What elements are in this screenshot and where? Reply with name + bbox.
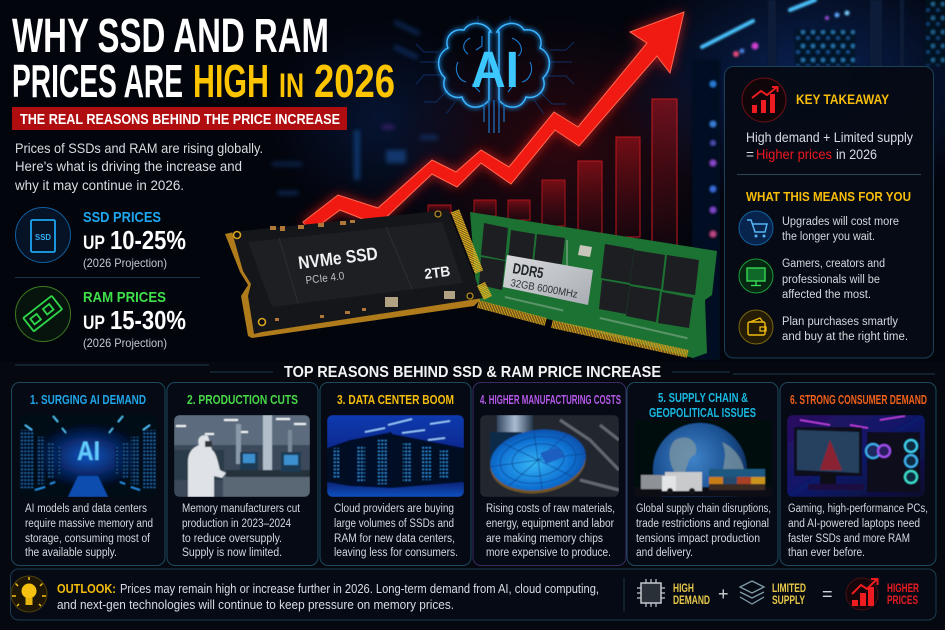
stat: RAM prices — [16, 286, 186, 350]
title — [12, 10, 395, 107]
description: and AI-powered laptops need — [788, 518, 920, 530]
intro text: Here's what is driving the increase and — [15, 158, 242, 174]
image: AI server corridor: AI — [77, 436, 100, 466]
equation: limited supply: SUPPLY — [772, 595, 805, 607]
outlook text: Prices may remain high or increase further in 2026. Long-term demand from AI, cloud computing, — [120, 581, 599, 596]
title: PRICES ARE — [12, 55, 183, 107]
panel: reason 4 higher manufacturing costs: 4. HIGHER MANUFACTURING COSTS — [480, 392, 621, 407]
panel: key takeaway: WHAT THIS MEANS FOR YOU — [746, 189, 911, 204]
equation: high demand: HIGH — [673, 583, 694, 595]
description: trade restrictions and regional — [636, 518, 769, 530]
item: gamers and creators affected: professionals will be — [782, 274, 880, 286]
stat: SSD prices: SSD PRICES — [83, 209, 161, 226]
stat: RAM prices: (2026 Projection) — [83, 336, 167, 350]
description: Rising costs of raw materials, — [486, 503, 615, 515]
icon: red rising chart — [742, 78, 786, 122]
item: upgrades cost more — [739, 211, 899, 245]
stat: SSD prices — [16, 208, 186, 270]
title: HIGH — [193, 55, 269, 107]
equation: higher prices: PRICES — [887, 595, 918, 607]
item: gamers and creators affected: Gamers, creators and — [782, 258, 885, 270]
description: production in 2023–2024 — [182, 518, 292, 530]
RAM memory chips — [479, 223, 699, 328]
description — [25, 503, 153, 559]
equation: limited supply: LIMITED — [772, 583, 806, 595]
equation: high demand — [637, 579, 710, 607]
SSD gold contacts — [455, 211, 479, 272]
panel: key takeaway: KEY TAKEAWAY — [796, 91, 890, 107]
SSD black label: PCIe 4.0 — [305, 270, 345, 287]
panel: reason 2 production cuts — [167, 382, 318, 566]
panel: reason 4 higher manufacturing costs — [473, 382, 626, 566]
stat: RAM prices: 15-30% — [110, 305, 186, 335]
panel: reason 3 data center boom — [320, 382, 471, 566]
panel: reason 5 supply chain and geopolitical issues: 5. SUPPLY CHAIN & — [658, 390, 748, 405]
stat: RAM prices: RAM PRICES — [83, 289, 166, 306]
panel: key takeaway — [724, 66, 934, 358]
item: plan purchases — [739, 310, 908, 344]
RAM silver label — [503, 255, 593, 305]
description: the available supply. — [25, 547, 117, 559]
item: gamers and creators affected: affected the most. — [782, 289, 871, 301]
stat: RAM prices: UP — [83, 313, 105, 334]
image: server racks — [327, 415, 464, 497]
description — [788, 503, 928, 559]
section heading: TOP REASONS BEHIND SSD & RAM PRICE INCREASE — [284, 364, 661, 381]
equation: high demand: DEMAND — [673, 595, 710, 607]
outlook text — [57, 581, 599, 612]
outlook text: OUTLOOK: — [57, 581, 116, 596]
stat: SSD prices: 10-25% — [110, 225, 186, 255]
description: Supply is now limited. — [182, 547, 282, 559]
icon: RAM stick — [16, 286, 70, 342]
SSD black label: 2TB — [424, 264, 451, 283]
panel: reason 2 production cuts: 2. PRODUCTION CUTS — [187, 392, 298, 407]
image: globe, trucks and containers — [640, 422, 766, 497]
takeaway text: = — [746, 147, 754, 162]
title: 2026 — [314, 55, 395, 107]
subtitle banner: THE REAL REASONS BEHIND THE PRICE INCREASE — [20, 112, 340, 128]
subtitle banner — [12, 107, 347, 130]
description: to reduce oversupply. — [182, 533, 282, 545]
panel: reason 5 supply chain and geopolitical issues: GEOPOLITICAL ISSUES — [649, 405, 756, 420]
icon: SSD drive: SSD — [35, 233, 51, 242]
section heading — [15, 364, 935, 381]
equation: higher prices: HIGHER — [887, 583, 919, 595]
description: energy, equipment and labor — [486, 518, 614, 530]
image: factory worker — [174, 415, 310, 497]
item: gamers and creators affected — [739, 258, 885, 301]
description — [182, 503, 301, 559]
item: plan purchases: Plan purchases smartly — [782, 316, 898, 328]
panel: reason 5 supply chain and geopolitical issues — [627, 382, 778, 566]
intro text: Prices of SSDs and RAM are rising globally. — [15, 140, 263, 156]
stat: SSD prices: (2026 Projection) — [83, 256, 167, 270]
item: upgrades cost more: the longer you wait. — [782, 231, 875, 243]
description: large volumes of SSDs and — [334, 518, 454, 530]
RAM gold contacts — [478, 304, 688, 354]
description: RAM for new data centers, — [334, 533, 455, 545]
panel: reason 1 surging AI demand — [12, 382, 165, 566]
description: Global supply chain disruptions, — [636, 503, 771, 515]
description: and delivery. — [636, 547, 693, 559]
description: leaving less for consumers. — [334, 547, 458, 559]
intro text: why it may continue in 2026. — [14, 177, 184, 193]
item: plan purchases: and buy at the right time. — [782, 331, 908, 343]
panel: reason 3 data center boom: 3. DATA CENTER BOOM — [337, 392, 454, 407]
description: storage, consuming most of — [25, 533, 151, 545]
takeaway text — [746, 130, 913, 162]
icon: light bulb — [11, 576, 47, 612]
item: upgrades cost more: Upgrades will cost more — [782, 216, 899, 228]
description: more expensive to produce. — [486, 547, 611, 559]
RAM silver label: 32GB 6000MHz — [509, 277, 579, 301]
description: than ever before. — [788, 547, 865, 559]
stat: SSD prices: UP — [83, 233, 105, 254]
image: gaming PC and monitor — [787, 415, 925, 497]
SSD black label: NVMe SSD — [297, 243, 379, 273]
takeaway text: in 2026 — [836, 147, 877, 162]
image: AI server corridor — [19, 415, 157, 497]
description — [334, 503, 458, 559]
arrow: price trend rising — [303, 12, 684, 232]
outlook text: and next-gen technologies will continue to keep pressure on memory prices. — [57, 597, 454, 612]
equation: limited supply — [740, 581, 806, 607]
chart: rising red bars — [428, 99, 677, 245]
image: silicon wafer — [480, 415, 619, 499]
description: Memory manufacturers cut — [182, 503, 301, 515]
intro text — [14, 140, 263, 193]
icon: SSD drive — [16, 208, 70, 262]
takeaway text: High demand + Limited supply — [746, 130, 913, 145]
description: require massive memory and — [25, 518, 153, 530]
title: IN — [279, 67, 304, 105]
panel: outlook — [10, 569, 936, 620]
plus sign: + — [718, 584, 729, 604]
equation: higher prices — [846, 578, 919, 610]
panel: reason 6 strong consumer demand — [780, 382, 936, 566]
description: tensions impact production — [636, 533, 760, 545]
panel: reason 1 surging AI demand: 1. SURGING AI DEMAND — [30, 392, 146, 407]
description: AI models and data centers — [25, 503, 147, 515]
icon: AI brain — [416, 16, 574, 133]
description: faster SSDs and more RAM — [788, 533, 910, 545]
takeaway text: Higher prices — [756, 147, 832, 162]
description: Cloud providers are buying — [334, 503, 454, 515]
title: WHY SSD AND RAM — [12, 10, 329, 63]
equals sign: = — [822, 584, 833, 604]
section band background — [0, 362, 945, 630]
SSD black label — [248, 222, 463, 307]
RAM silver label: DDR5 — [511, 260, 545, 282]
description — [486, 503, 615, 559]
illustration: NVMe SSD module — [225, 210, 488, 338]
AI brain label: AI — [471, 41, 519, 98]
illustration: DDR5 RAM module — [470, 212, 717, 358]
description: are making memory chips — [486, 533, 603, 545]
description — [636, 503, 771, 559]
